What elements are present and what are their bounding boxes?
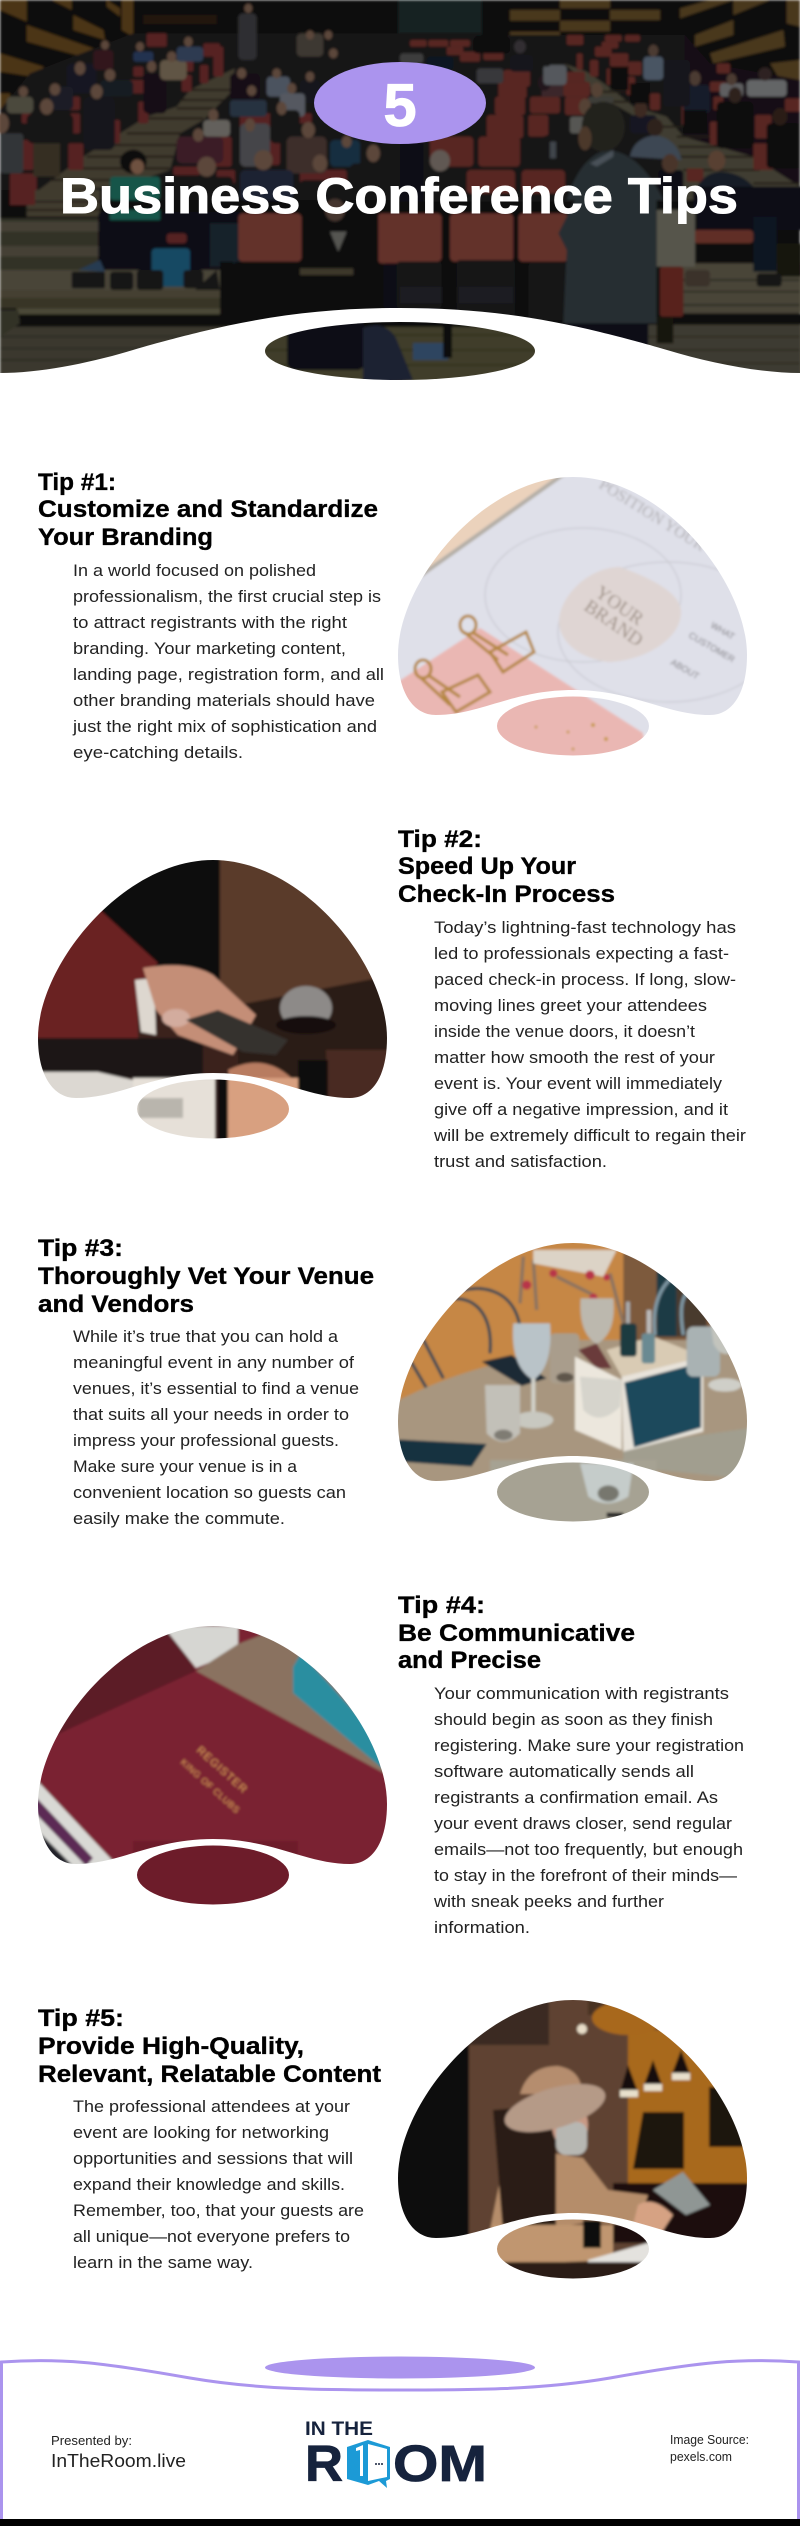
tip 2 body text: matter how smooth the rest of your <box>434 1049 716 1067</box>
footer frame and wave line <box>2 2361 798 2519</box>
tip 3 heading <box>38 1235 374 1318</box>
tip 4 photo: red register book: REGISTER <box>194 1744 250 1796</box>
tip 5 photo: woman in hat and mask <box>393 1995 753 2290</box>
tip 3 body text: While it’s true that you can hold a <box>73 1328 339 1346</box>
tip 5 body text: expand their knowledge and skills. <box>73 2176 345 2194</box>
oval contents <box>490 1460 657 1527</box>
tip 5 body text: opportunities and sessions that will <box>73 2150 353 2168</box>
tip 1 body text: landing page, registration form, and all <box>73 666 384 684</box>
tip 5 heading: Tip #5: <box>38 2005 124 2032</box>
people bodies <box>27 113 73 143</box>
tip 1 body text: other branding materials should have <box>73 692 375 710</box>
tip 1 body text: to attract registrants with the right <box>73 614 347 632</box>
tip 4 heading <box>398 1592 635 1674</box>
tip 5 heading: Provide High-Quality, <box>38 2033 304 2060</box>
presented by: InTheRoom.live <box>51 2451 186 2471</box>
tip 4 body text: with sneak peeks and further <box>433 1893 665 1911</box>
tip 2 heading: Speed Up Your <box>398 853 576 880</box>
steps and floor <box>680 263 800 313</box>
glasses <box>550 1333 579 1383</box>
red seats <box>410 35 800 193</box>
white wave under hero <box>0 308 800 392</box>
tip 1 photo: branding sheet and clips: BRAND <box>580 596 647 651</box>
logo: In the Room: IN THE <box>305 2418 373 2440</box>
logo: In the Room <box>305 2418 487 2492</box>
tip 2 body text: event is. Your event will immediately <box>434 1075 723 1093</box>
paperclips <box>415 616 534 712</box>
tip 2 body text: paced check-in process. If long, slow- <box>434 971 736 989</box>
tip 2 body text: inside the venue doors, it doesn’t <box>434 1023 695 1041</box>
panel: tip 3 <box>38 1235 758 1540</box>
tip 1 body text: eye-catching details. <box>73 744 243 762</box>
tip 2 heading: Tip #2: <box>398 826 482 853</box>
tip 1 body text: just the right mix of sophistication and <box>72 718 377 736</box>
legs and bags <box>98 212 242 270</box>
title: Business Conference Tips <box>60 168 738 224</box>
tip 1 body text <box>72 562 384 762</box>
tip 1 heading: Your Branding <box>38 524 213 551</box>
tip 5 body text: event are looking for networking <box>73 2124 329 2142</box>
panel: tip 4 <box>33 1592 744 1937</box>
tip 1 body text: branding. Your marketing content, <box>73 640 346 658</box>
panel: footer <box>2 2356 798 2519</box>
tip 1 heading <box>38 469 378 551</box>
right person <box>693 187 800 230</box>
tip 2 photo: hands and card at desk <box>33 855 393 1150</box>
tip 2 heading: Check-In Process <box>398 881 615 908</box>
panel: tip 5 <box>38 1995 753 2290</box>
tip 4 body text: information. <box>434 1919 530 1937</box>
tip 3 photo: table setting <box>398 1243 747 1522</box>
table <box>398 1338 747 1481</box>
tip 4 photo: red register book <box>33 1621 393 1916</box>
tip 4 body text: registrants a confirmation email. As <box>434 1789 718 1807</box>
tip 3 body text: meaningful event in any number of <box>73 1354 354 1372</box>
right half of audience, upper <box>398 0 800 202</box>
tip 5 heading: Relevant, Relatable Content <box>38 2061 381 2088</box>
number badge <box>314 62 486 144</box>
tip 3 body text: Make sure your venue is in a <box>73 1458 298 1476</box>
tip 4 body text: should begin as soon as they finish <box>434 1711 713 1729</box>
tip 2 body text: give off a negative impression, and it <box>434 1101 728 1119</box>
tip 1 heading: Customize and Standardize <box>38 496 378 523</box>
tip 1 photo: branding sheet and clips: YOUR <box>591 582 648 630</box>
tip 3 body text <box>73 1328 359 1528</box>
tip 4 body text: to stay in the forefront of their minds— <box>434 1867 738 1885</box>
tip 5 heading <box>38 2005 381 2088</box>
tip 4 heading: Tip #4: <box>398 1592 485 1619</box>
tip 5 body text: Remember, too, that your guests are <box>73 2202 364 2220</box>
people bodies <box>528 133 582 170</box>
presenter head and shoulders <box>567 102 663 200</box>
tip 3 body text: easily make the commute. <box>73 1510 285 1528</box>
lower left: steps, legs and front row <box>0 190 403 383</box>
tip 2 body text: Today’s lightning-fast technology has <box>434 919 736 937</box>
tip 4 photo: red register book: KING OF CLUBS <box>179 1757 242 1815</box>
tip 3 heading: Thoroughly Vet Your Venue <box>38 1263 374 1290</box>
tip 1 body text: In a world focused on polished <box>73 562 316 580</box>
logo: In the Room: OM <box>393 2435 487 2492</box>
tip 2 body text: will be extremely difficult to regain their <box>433 1127 747 1145</box>
tip 4 body text: Your communication with registrants <box>434 1685 729 1703</box>
tip 3 heading: Tip #3: <box>38 1235 123 1262</box>
tip 3 body text: venues, it’s essential to find a venue <box>73 1380 359 1398</box>
tip 1 heading: Tip #1: <box>38 469 116 496</box>
presented by <box>51 2433 186 2471</box>
tip 1 photo: branding sheet and clips: WHAT <box>709 620 737 642</box>
woman in black <box>297 213 377 317</box>
tip 2 body text <box>433 919 747 1171</box>
hero photo: conference audience <box>0 0 800 383</box>
lower right: seats, presenter and steps <box>397 187 800 381</box>
right aisle stairs <box>563 63 800 200</box>
tip 4 body text: software automatically sends all <box>434 1763 694 1781</box>
black bottom bar <box>0 2519 800 2526</box>
image source: pexels.com <box>670 2450 732 2464</box>
image source <box>670 2433 749 2464</box>
icon: door <box>347 2440 390 2488</box>
presenter <box>558 190 657 323</box>
tip 5 body text: learn in the same way. <box>73 2254 253 2272</box>
left half of audience, upper <box>0 0 400 200</box>
tip 3 body text: convenient location so guests can <box>73 1484 346 1502</box>
people heads <box>0 4 380 177</box>
tip 3 body text: that suits all your needs in order to <box>73 1406 349 1424</box>
tip 2 body text: moving lines greet your attendees <box>434 997 707 1015</box>
presented by: Presented by: <box>51 2433 132 2448</box>
tip 3 body text: impress your professional guests. <box>73 1432 339 1450</box>
tip 1 body text: professionalism, the first crucial step is <box>73 588 381 606</box>
aisle stairs <box>37 68 235 192</box>
tip 2 heading <box>398 826 615 908</box>
image source: Image Source: <box>670 2433 749 2447</box>
tip 5 body text: The professional attendees at your <box>73 2098 351 2116</box>
tip 4 heading: and Precise <box>398 1647 541 1674</box>
tip 2 body text: led to professionals expecting a fast- <box>434 945 729 963</box>
footer purple oval <box>265 2356 535 2378</box>
panel: tip 1 <box>38 469 778 767</box>
number badge: 5 <box>383 72 417 139</box>
tip 4 body text <box>433 1685 744 1937</box>
caddy box <box>606 1336 688 1378</box>
woman <box>488 2152 650 2228</box>
tip 1 photo: branding sheet and clips: CUSTOMER <box>687 630 737 665</box>
tip 1 photo: branding sheet and clips <box>398 477 747 756</box>
small oval content <box>493 2225 613 2265</box>
logo: In the Room: R <box>305 2435 343 2492</box>
tip 3 heading: and Vendors <box>38 1291 194 1318</box>
tip 4 heading: Be Communicative <box>398 1620 635 1647</box>
tip 1 photo: branding sheet and clips: ABOUT <box>669 657 701 681</box>
tip 5 body text: all unique—not everyone prefers to <box>73 2228 350 2246</box>
red seats <box>10 33 347 200</box>
front seat <box>238 213 302 262</box>
tip 4 body text: your event draws closer, send regular <box>434 1815 733 1833</box>
tip 2 body text: trust and satisfaction. <box>434 1153 607 1171</box>
tip 4 body text: emails—not too frequently, but enough <box>434 1841 743 1859</box>
panel: tip 2 <box>33 826 747 1171</box>
tip 5 body text <box>73 2098 364 2272</box>
dim overlay <box>0 0 800 375</box>
hero small oval photo <box>265 322 535 380</box>
tip 4 body text: registering. Make sure your registration <box>434 1737 744 1755</box>
tip 1 photo: branding sheet and clips: POSITION YOUR <box>596 476 708 555</box>
